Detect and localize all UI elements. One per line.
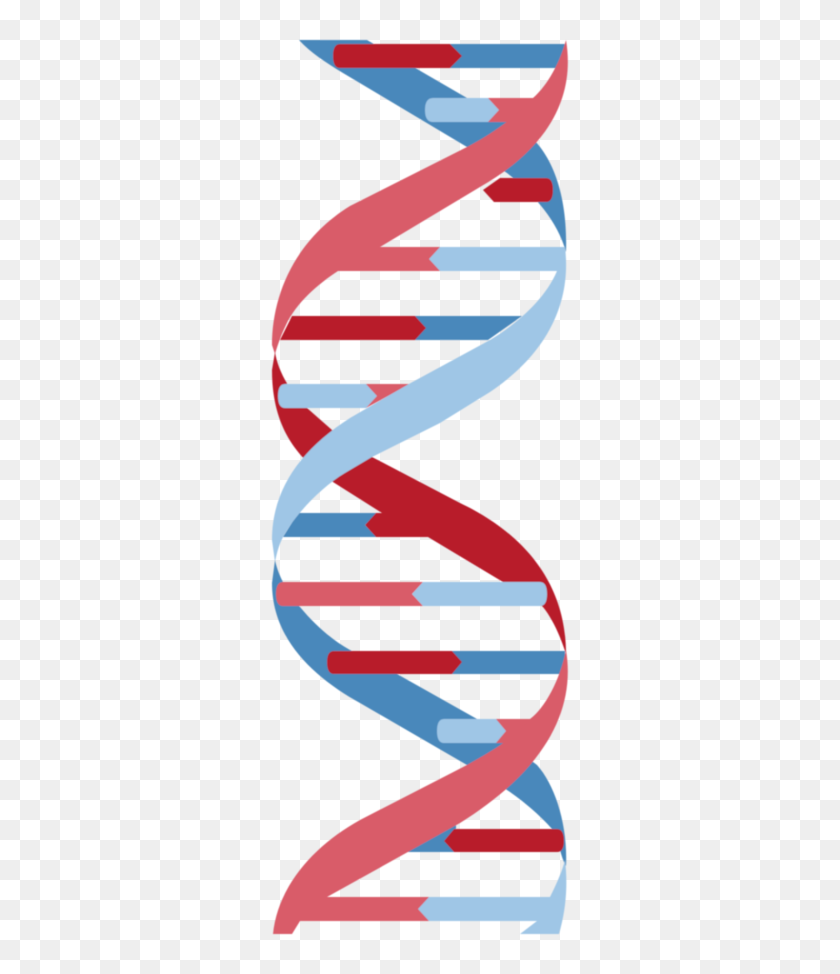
DNA helix [272, 40, 568, 934]
base pair 1: red and blue [333, 44, 565, 68]
base pair 3: red [483, 178, 553, 202]
upper dark blue strand [299, 40, 566, 252]
base pair 5: red and blue [280, 316, 522, 340]
base pair 4: light blue and pink [429, 247, 565, 271]
base pair 7: blue [283, 513, 376, 537]
base pair 9: red and blue [327, 651, 565, 674]
middle light blue strand [272, 247, 566, 562]
base pair 8: pink and light blue [276, 582, 547, 606]
middle red strand [272, 352, 566, 654]
base pair 2: light blue and pink [425, 98, 540, 122]
base pair 11: red and blue [398, 825, 564, 852]
base pair 6: light blue and pink [278, 384, 410, 408]
upper pink strand [272, 40, 568, 354]
lower pink strand [273, 650, 568, 934]
base pair 10: light blue and pink [437, 719, 535, 743]
base pair 12 and lower light blue strand [418, 860, 566, 934]
lower dark blue strand [272, 560, 566, 866]
